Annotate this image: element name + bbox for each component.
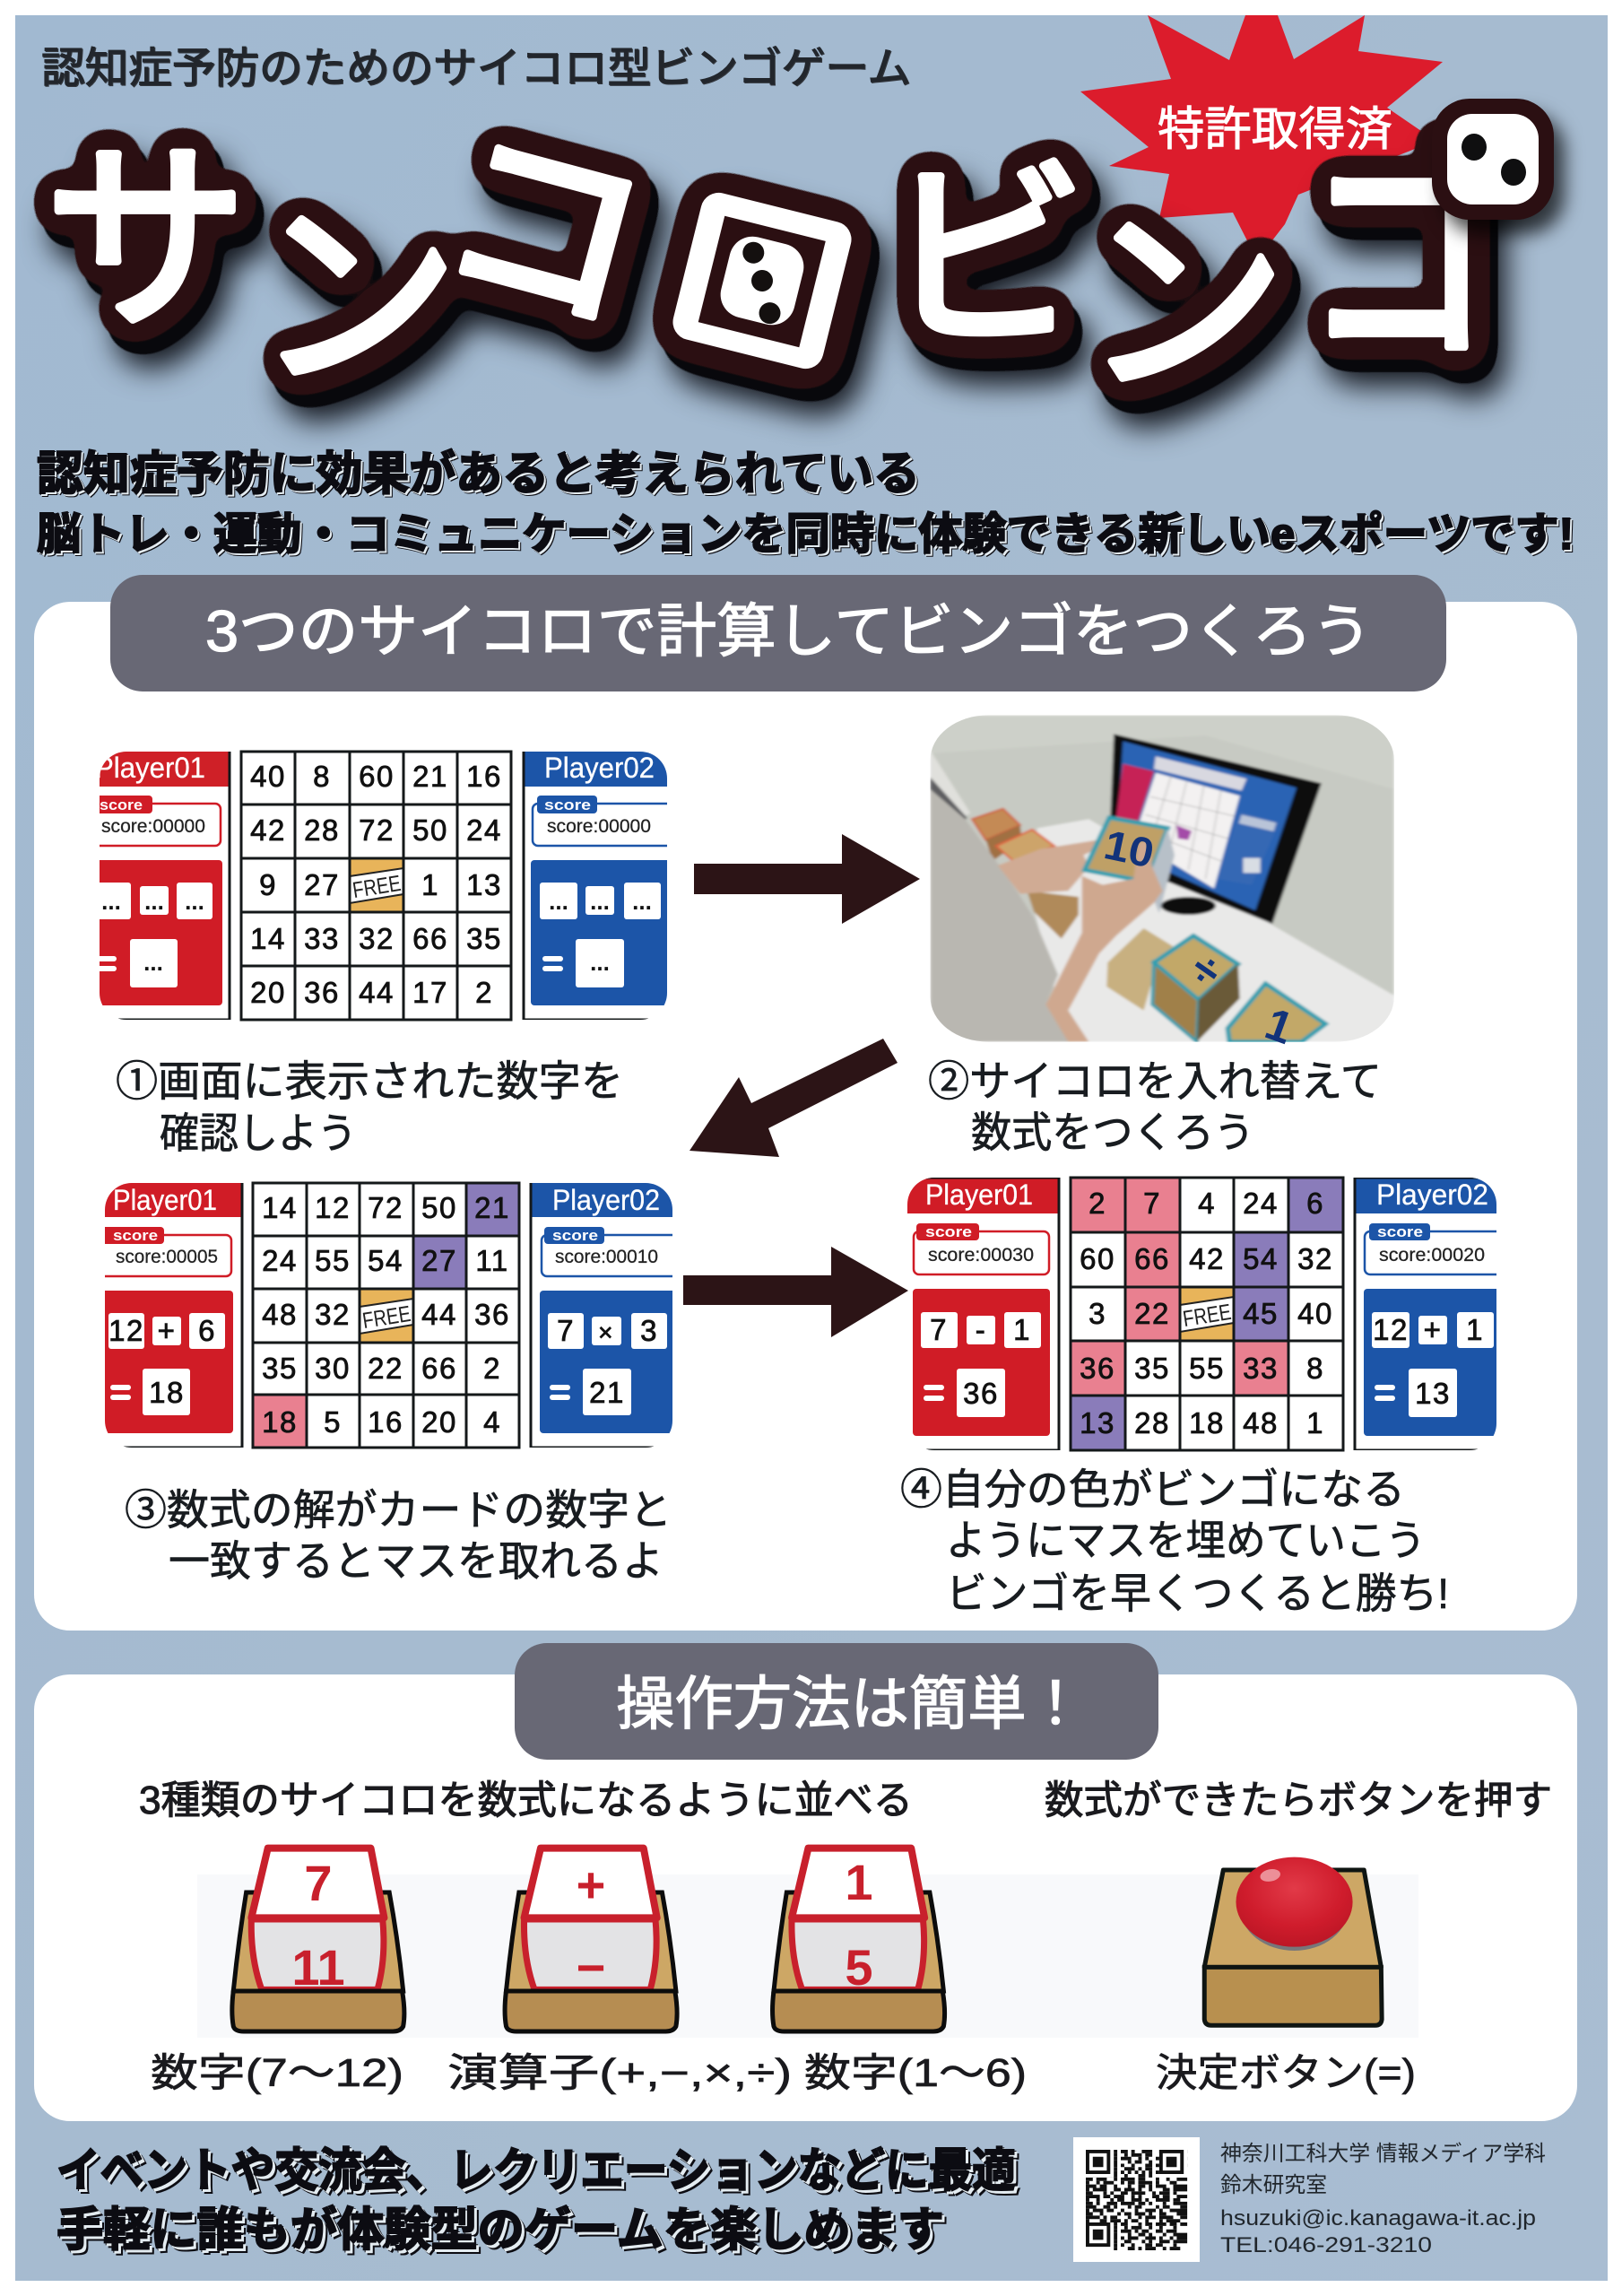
icon: red starburst [1080,15,1443,260]
patent label: 特許取得済 [1158,104,1392,156]
board: step 4: 36 [1080,1352,1115,1385]
board: step 3: 27 [421,1244,457,1277]
board: step 3: 18 [149,1376,185,1409]
contact information [1220,2142,1546,2257]
board: step 4: 60 [1080,1242,1115,1275]
board: step 4: 8 [1306,1352,1324,1385]
board: step 4: 7 [930,1313,948,1346]
instruction: arrange dice: 3種類のサイコロを数式になるように並べる [139,1779,913,1822]
board: step 3: 66 [421,1352,457,1385]
board: step 1: ... [144,888,164,915]
board: step 1: 27 [304,868,340,901]
board: step 1: 50 [412,813,448,847]
icon: small dice on title [1432,99,1554,220]
board: step 4: 13 [1415,1377,1451,1410]
contact information: 神奈川工科大学 情報メディア学科 [1220,2142,1546,2166]
board: step 1: 20 [250,976,286,1009]
board: step 3: 54 [368,1244,403,1277]
board: step 1: 24 [466,813,502,847]
board: step 3: 12 [108,1314,144,1347]
panel: controls [34,1643,1577,2121]
board: step 1: 17 [412,976,448,1009]
board: step 3: 3 [640,1314,658,1347]
board: step 4: 24 [1243,1187,1279,1220]
board: step 1: 32 [359,922,395,955]
contact information: hsuzuki@ic.kanagawa-it.ac.jp [1220,2206,1536,2231]
title logo: ン [1083,140,1286,433]
board: step 1: 33 [304,922,340,955]
board: step 1: 44 [359,976,395,1009]
step 2 caption: 数式をつくろう [971,1109,1254,1156]
tagline [37,448,1574,559]
board: step 4: 12 [1373,1313,1409,1346]
board: step 1: 8 [313,760,331,793]
photo dice labels: 1 [1259,998,1299,1054]
board: step 1: 60 [359,760,395,793]
board: step 3: 2 [483,1352,501,1385]
board: step 4: 18 [1189,1406,1225,1439]
step 2 caption: ②サイコロを入れ替えて [928,1057,1382,1105]
board: step 4: 7 [1143,1187,1161,1220]
board: step 3: 22 [368,1352,403,1385]
board: step 3: 4 [483,1405,501,1439]
board: step 3: 32 [315,1298,351,1331]
photo: player swapping dice at monitor [931,715,1394,1042]
board: step 1 [90,752,681,1020]
board: step 1: 72 [359,813,395,847]
board: step 1: 36 [304,976,340,1009]
board: step 1: score:00000 [547,816,651,837]
board: step 3: 20 [421,1405,457,1439]
board: step 4: 6 [1306,1187,1324,1220]
title logo: コ [415,48,682,378]
title logo: サ [45,76,247,370]
board: step 1: 13 [466,868,502,901]
board: step 3: 12 [315,1191,351,1224]
arrow: step 2 to step 3 [690,1039,898,1157]
title logo: ビ [884,94,1087,387]
board: step 1: ... [590,949,610,976]
board: step 1: ... [590,888,610,915]
board: step 1: 1 [421,868,439,901]
board: step 4: 42 [1189,1242,1225,1275]
board: step 1: 42 [250,813,286,847]
board: step 4: 66 [1134,1242,1170,1275]
board: step 4: 1 [1306,1406,1324,1439]
board: step 3: 30 [315,1352,351,1385]
board: step 1: Player02 [544,752,655,784]
icon: number die 1 to 6: 5 [845,1939,873,1996]
board: step 1: score:00000 [101,816,205,837]
board: step 4: - [976,1313,986,1346]
step 4 caption [900,1465,1449,1617]
step 3 caption: ③数式の解がカードの数字と [125,1486,672,1534]
board: step 3: 21 [474,1191,510,1224]
board: step 3: 24 [262,1244,298,1277]
arrow: step 3 to step 4 [683,1247,908,1337]
board: step 4: 48 [1243,1406,1279,1439]
board: step 3: 5 [324,1405,342,1439]
icon: number die 1 to 6: 1 [845,1854,873,1910]
board: step 3: Player01 [113,1184,217,1216]
board: step 4: 55 [1189,1352,1225,1385]
step 4 caption: ビンゴを早くつくると勝ち! [946,1570,1449,1617]
board: step 1: 35 [466,922,502,955]
board: step 1: ... [549,888,568,915]
photo dice labels [1100,821,1299,1054]
heading: how to play: 3つのサイコロで計算してビンゴをつくろう [205,598,1372,664]
board: step 3 [90,1183,683,1448]
board: step 4: 4 [1198,1187,1216,1220]
board: step 4 [897,1178,1508,1450]
icon: number die 1 to 6 [773,1848,945,2031]
step 1 caption: 確認しよう [160,1109,357,1157]
board: step 3: 16 [368,1405,403,1439]
board: step 3: 18 [262,1405,298,1439]
board: step 3: 36 [474,1298,510,1331]
board: step 3: FREE [360,1301,412,1334]
board: step 4: 36 [963,1377,999,1410]
board: step 1: 16 [466,760,502,793]
step 3 caption [125,1486,672,1585]
board: step 1: score [544,796,591,813]
board: step 3: 55 [315,1244,351,1277]
step 4 caption: ④自分の色がビンゴになる [900,1465,1405,1513]
board: step 4: 3 [1089,1297,1106,1330]
board: step 4: 32 [1297,1242,1333,1275]
footer slogan: 手軽に誰もが体験型のゲームを楽しめます [56,2205,944,2257]
icon: red decision button [1204,1857,1382,2025]
board: step 4: + [1424,1313,1442,1346]
title logo: ゴ [1305,60,1498,406]
board: step 4: 45 [1243,1297,1279,1330]
board: step 3: Player02 [552,1184,660,1216]
board: step 4: 2 [1089,1187,1106,1220]
patent badge [1080,15,1443,260]
board: step 1: 21 [412,760,448,793]
board: step 3: + [158,1314,176,1347]
board: step 3: 6 [198,1314,216,1347]
icon: operator die [505,1848,677,2031]
board: step 3: 72 [368,1191,403,1224]
arrow: step 1 to step 2 [694,834,920,924]
board: step 3: score [113,1227,158,1244]
title logo [45,48,1498,433]
footer slogan: イベントや交流会、レクリエーションなどに最適 [56,2145,1016,2197]
board: step 1: 66 [412,922,448,955]
tagline: 脳トレ・運動・コミュニケーションを同時に体験できる新しいeスポーツです! [37,510,1574,559]
faint background artwork [197,1874,1418,2038]
board: step 3: 50 [421,1191,457,1224]
board: step 4: FREE [1181,1300,1233,1332]
board: step 4: Player01 [925,1178,1033,1211]
heading: easy controls [515,1643,1158,1760]
board: step 4: 13 [1080,1406,1115,1439]
board: step 1: 40 [250,760,286,793]
board: step 4: score:00020 [1379,1245,1485,1265]
step 1 caption [116,1057,623,1157]
label: number die 7 to 12: 数字(7〜12) [151,2051,403,2095]
board: step 4: 1 [1013,1313,1031,1346]
label: number die 1 to 6: 数字(1〜6) [804,2051,1027,2095]
board: step 1: 28 [304,813,340,847]
step 4 caption: ようにマスを埋めていこう [946,1517,1426,1564]
board: step 4: 1 [1466,1313,1484,1346]
panel: how to play [34,575,1577,1631]
icon: operator die: − [577,1939,605,1996]
label: decision button: 決定ボタン(=) [1156,2051,1416,2095]
board: step 4: 54 [1243,1242,1279,1275]
photo dice labels: 10 [1100,821,1158,876]
board: step 4: 40 [1297,1297,1333,1330]
step 2 caption [928,1057,1382,1156]
board: step 1: score [100,796,143,813]
board: step 1: 9 [259,868,277,901]
board: step 1: 2 [475,976,493,1009]
board: step 1: ... [185,888,204,915]
board: step 3: 7 [557,1314,575,1347]
icon: title dice: ロ [653,129,877,410]
step 3 caption: 一致するとマスを取れるよ [169,1537,664,1585]
board: step 3: 48 [262,1298,298,1331]
board: step 3: 14 [262,1191,298,1224]
heading: easy controls: 操作方法は簡単！ [616,1671,1085,1736]
board: step 1: FREE [351,871,403,903]
board: step 1: ... [143,949,163,976]
board: step 3: score [552,1227,598,1244]
board: step 4: score:00030 [928,1245,1034,1265]
step 1 caption: ①画面に表示された数字を [116,1057,623,1105]
board: step 3: 44 [421,1298,457,1331]
contact information: TEL:046-291-3210 [1220,2233,1432,2257]
board: step 4: Player02 [1376,1178,1488,1211]
board: step 4: 33 [1243,1352,1279,1385]
QR code [1073,2137,1200,2262]
icon: number die 7 to 12: 11 [291,1939,345,1996]
icon: number die 7 to 12: 7 [304,1855,333,1911]
board: step 4: score [1377,1223,1423,1240]
board: step 1: 14 [250,922,286,955]
title logo: ン [256,134,458,427]
footer slogan [56,2145,1016,2257]
board: step 1: Player01 [95,752,205,784]
photo dice labels: ÷ [1180,942,1231,999]
tagline: 認知症予防に効果があると考えられている [37,448,920,500]
contact information: 鈴木研究室 [1220,2173,1327,2197]
subtitle: 認知症予防のためのサイコロ型ビンゴゲーム [41,44,911,91]
icon: number die 7 to 12 [232,1848,404,2031]
board: step 1: ... [101,888,121,915]
board: step 3: 35 [262,1352,298,1385]
board: step 4: 22 [1134,1297,1170,1330]
board: step 3: score:00010 [555,1247,658,1267]
board: step 4: 28 [1134,1406,1170,1439]
board: step 3: score:00005 [116,1247,218,1267]
board: step 4: score [925,1223,972,1240]
board: step 1: ... [632,888,652,915]
board: step 4: 35 [1134,1352,1170,1385]
board: step 3: 11 [475,1244,509,1277]
heading: how to play [110,575,1446,691]
icon: operator die: + [577,1857,605,1913]
board: step 3: 21 [589,1376,625,1409]
label: operator die: 演算子(+,−,×,÷) [447,2051,792,2095]
instruction: press button: 数式ができたらボタンを押す [1045,1779,1552,1822]
board: step 3: × [598,1318,614,1346]
